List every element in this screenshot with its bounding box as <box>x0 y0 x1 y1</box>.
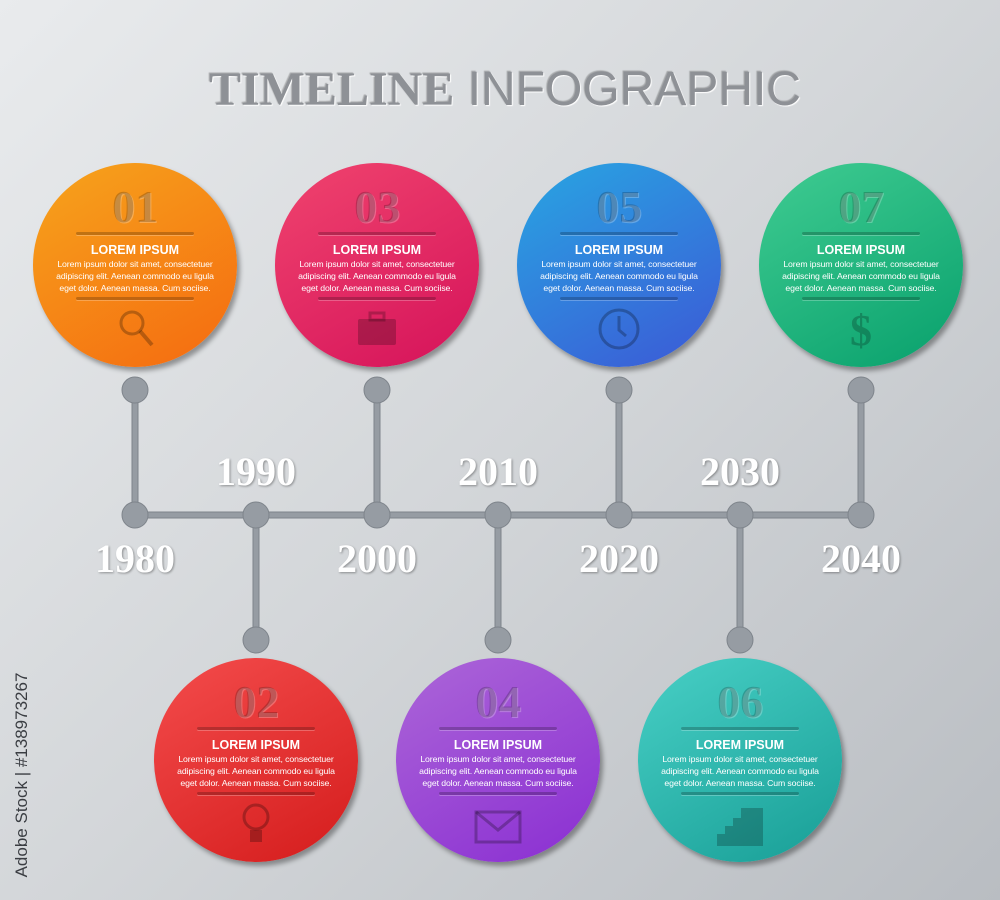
panel 05: 05 <box>596 181 642 232</box>
panel 07: 07 <box>838 181 884 232</box>
panel 06: 06 <box>717 676 763 727</box>
panel 07: adipiscing elit. Aenean commodo eu ligula <box>782 271 940 281</box>
icon: stairs <box>717 808 763 846</box>
panel 02: Lorem ipsum dolor sit amet, consectetuer <box>178 754 334 764</box>
panel 02: eget dolor. Aenean massa. Cum sociise. <box>180 778 332 788</box>
panel 04 <box>396 658 600 862</box>
panel 05 <box>517 163 721 367</box>
panel 03: eget dolor. Aenean massa. Cum sociise. <box>301 283 453 293</box>
panel 06 <box>638 658 842 862</box>
panel 01: 01 <box>112 181 158 232</box>
panel 04: LOREM IPSUM <box>454 738 542 752</box>
watermark side text: Adobe Stock | #138973267 <box>12 673 31 877</box>
panel 01: eget dolor. Aenean massa. Cum sociise. <box>59 283 211 293</box>
panel 04: Lorem ipsum dolor sit amet, consectetuer <box>420 754 576 764</box>
text: 2020 <box>579 536 659 581</box>
panel 03 <box>275 163 479 367</box>
panel 03: adipiscing elit. Aenean commodo eu ligula <box>298 271 456 281</box>
panel 01: Lorem ipsum dolor sit amet, consectetuer <box>57 259 213 269</box>
panel 06: eget dolor. Aenean massa. Cum sociise. <box>664 778 816 788</box>
panel 07 <box>759 163 963 367</box>
panel 04: eget dolor. Aenean massa. Cum sociise. <box>422 778 574 788</box>
panel 05: eget dolor. Aenean massa. Cum sociise. <box>543 283 695 293</box>
panel 06: Lorem ipsum dolor sit amet, consectetuer <box>662 754 818 764</box>
panel 04: 04 <box>475 676 521 727</box>
panel 07: eget dolor. Aenean massa. Cum sociise. <box>785 283 937 293</box>
panel 07: LOREM IPSUM <box>817 243 905 257</box>
panel 05: adipiscing elit. Aenean commodo eu ligula <box>540 271 698 281</box>
panel 05: LOREM IPSUM <box>575 243 663 257</box>
panel 04: adipiscing elit. Aenean commodo eu ligula <box>419 766 577 776</box>
icon: clock <box>598 308 640 350</box>
text: 2010 <box>458 449 538 494</box>
panel 03: LOREM IPSUM <box>333 243 421 257</box>
title: TIMELINE INFOGRAPHIC <box>209 63 801 116</box>
text: 2040 <box>821 536 901 581</box>
panel 05: Lorem ipsum dolor sit amet, consectetuer <box>541 259 697 269</box>
panel 06: adipiscing elit. Aenean commodo eu ligula <box>661 766 819 776</box>
panel 02: 02 <box>233 676 279 727</box>
icon: briefcase <box>358 312 396 345</box>
icon: light bulb <box>242 804 270 842</box>
panel 06: LOREM IPSUM <box>696 738 784 752</box>
panel 02 <box>154 658 358 862</box>
panel 02: adipiscing elit. Aenean commodo eu ligula <box>177 766 335 776</box>
panel 01: LOREM IPSUM <box>91 243 179 257</box>
panel 03: Lorem ipsum dolor sit amet, consectetuer <box>299 259 455 269</box>
text: 2030 <box>700 449 780 494</box>
panel 01: adipiscing elit. Aenean commodo eu ligula <box>56 271 214 281</box>
icon: magnifier <box>120 310 154 346</box>
icon: envelope <box>474 810 522 844</box>
panel 03: 03 <box>354 181 400 232</box>
text: 1990 <box>216 449 296 494</box>
text: 2000 <box>337 536 417 581</box>
text: 1980 <box>95 536 175 581</box>
panel 07: Lorem ipsum dolor sit amet, consectetuer <box>783 259 939 269</box>
panel 01 <box>33 163 237 367</box>
panel 02: LOREM IPSUM <box>212 738 300 752</box>
year labels <box>95 449 902 581</box>
